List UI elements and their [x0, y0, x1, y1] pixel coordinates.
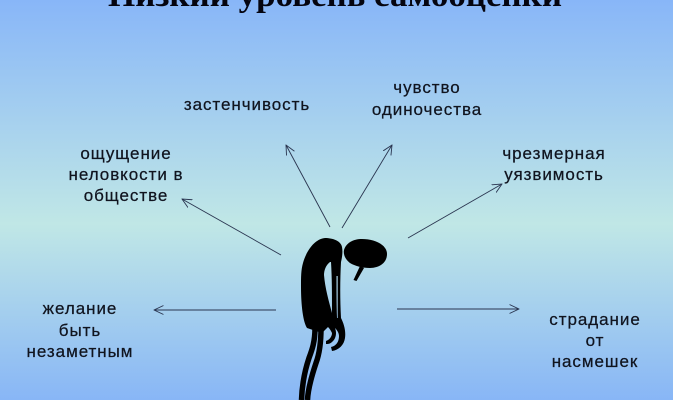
label: страдание от насмешек: страдание [549, 310, 641, 329]
arrow to застенчивость [286, 145, 330, 227]
label: чувство одиночества: чувство [393, 78, 461, 97]
arrow to желание быть незаметным [154, 309, 276, 311]
figure nose [354, 266, 364, 281]
label: желание быть незаметным: быть [59, 321, 101, 340]
label: желание быть незаметным: незаметным [27, 342, 133, 361]
label: застенчивость: застенчивость [184, 95, 310, 114]
label: страдание от насмешек: насмешек [552, 352, 638, 371]
arrow to страдание [397, 308, 519, 310]
figure legs [302, 328, 321, 400]
icon: stooped figure [301, 238, 387, 400]
arrows [154, 145, 519, 310]
figure head [344, 239, 387, 268]
label: чувство одиночества: одиночества [372, 100, 482, 119]
label: чрезмерная уязвимость: чрезмерная [502, 144, 606, 163]
figure right leg [308, 328, 321, 400]
label: страдание от насмешек: от [586, 331, 604, 350]
label: ощущение неловкости в обществе: ощущение [80, 144, 172, 163]
arrow to чувство одиночества [342, 145, 392, 228]
figure left leg [302, 328, 315, 400]
label: ощущение неловкости в обществе: неловкости в [69, 165, 183, 184]
label: чрезмерная уязвимость: уязвимость [504, 165, 604, 184]
arrow to уязвимость [408, 184, 502, 238]
label: ощущение неловкости в обществе: обществе [84, 186, 168, 205]
figure torso and arms [301, 238, 345, 351]
label: желание быть незаметным: желание [43, 299, 117, 318]
arrow to неловкость [182, 199, 281, 255]
